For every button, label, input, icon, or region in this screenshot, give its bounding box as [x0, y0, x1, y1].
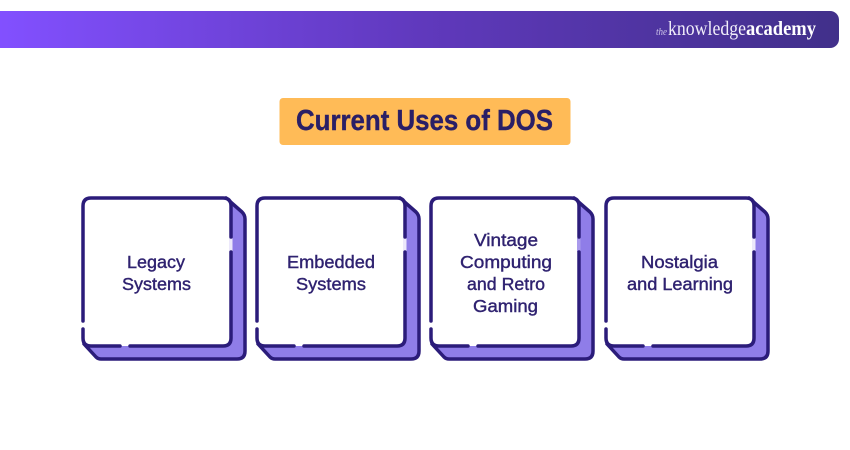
label: Systems	[296, 274, 366, 294]
label	[122, 252, 191, 294]
logo: the knowledge academy: academy	[746, 19, 816, 40]
title	[280, 98, 570, 145]
label: Legacy	[127, 252, 185, 272]
label	[627, 252, 733, 294]
card: Legacy Systems	[83, 198, 245, 359]
logo: the knowledge academy	[656, 19, 816, 40]
label: and Learning	[627, 274, 733, 294]
label: Vintage	[474, 230, 538, 250]
label: Systems	[122, 274, 191, 294]
card: Embedded Systems	[257, 198, 419, 359]
label: Computing	[460, 252, 552, 272]
label: and Retro	[467, 274, 545, 294]
label	[287, 252, 375, 294]
label: Gaming	[473, 296, 538, 316]
title: Current Uses of DOS	[296, 105, 553, 137]
label: Nostalgia	[641, 252, 718, 272]
logo: the knowledge academy: the	[656, 26, 667, 38]
logo: the knowledge academy: knowledge	[668, 19, 746, 40]
card: Nostalgia and Learning	[606, 198, 768, 359]
card: Vintage Computing and Retro Gaming	[431, 198, 593, 359]
header banner	[0, 11, 839, 48]
label: Embedded	[287, 252, 375, 272]
label	[460, 230, 552, 316]
